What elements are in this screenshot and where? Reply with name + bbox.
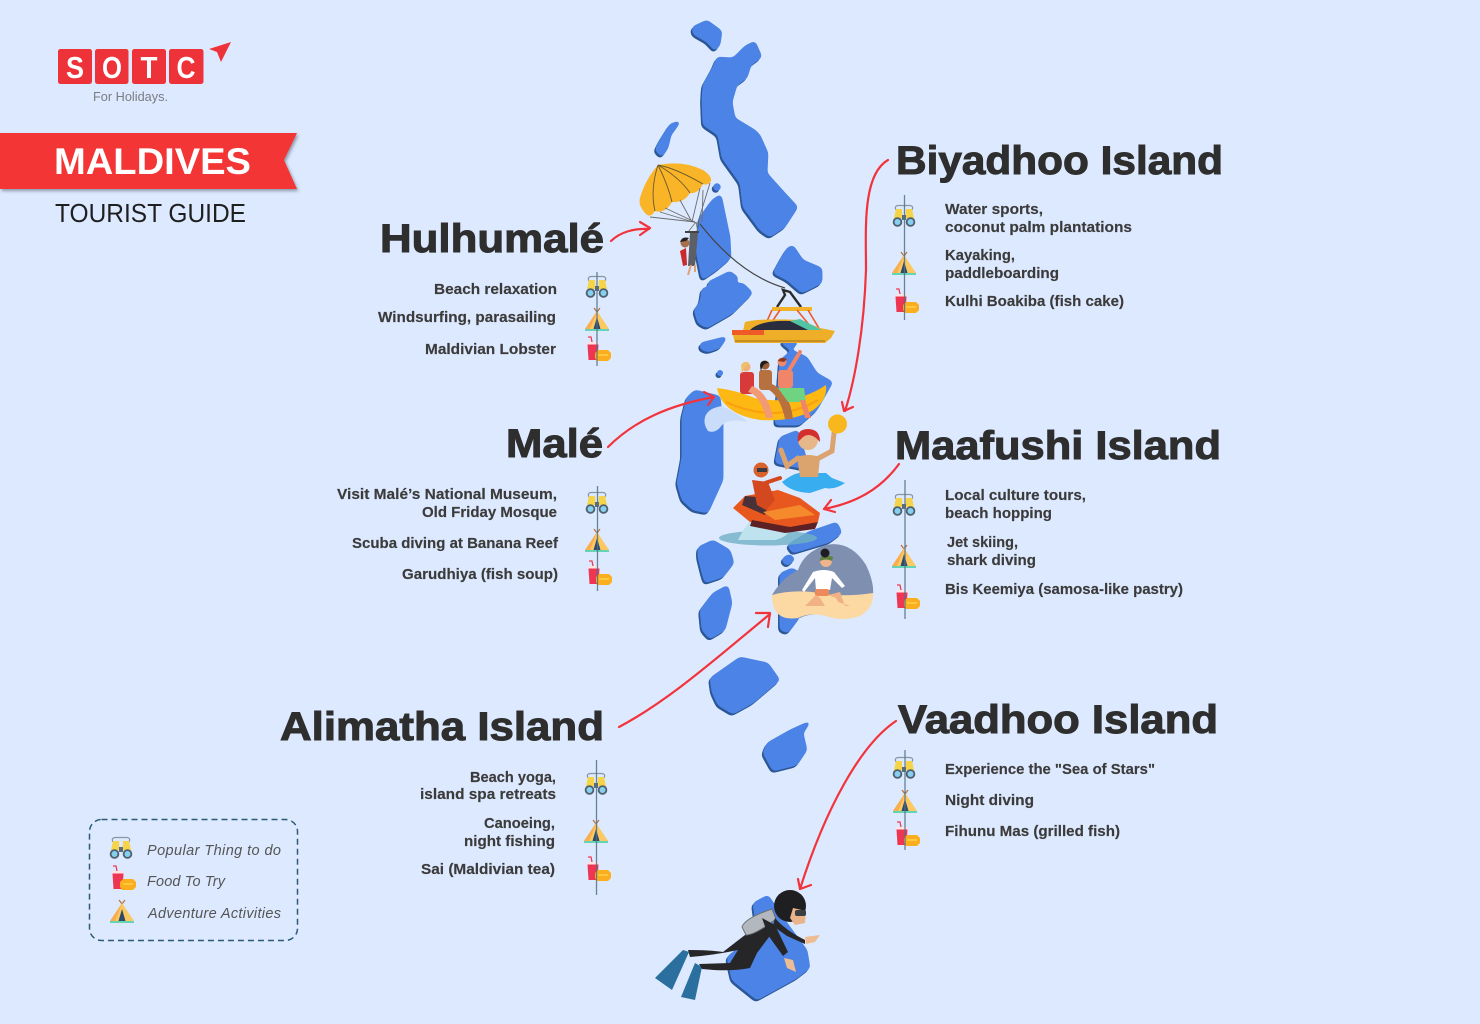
map: Maldives islands [655,20,842,1000]
panel: Maafushi Island: Local culture tours, [945,487,1086,504]
panel: Alimatha Island: Beach yoga, [470,769,556,786]
panel: Biyadhoo Island: Kulhi Boakiba (fish cake) [945,293,1124,310]
panel: Hulhumale [378,217,611,366]
panel: Biyadhoo Island: Water sports, [945,201,1043,218]
panel: Alimatha Island: island spa retreats [420,786,556,803]
illustration: scuba diver [655,890,820,1000]
arrow: Biyadhoo [842,160,888,411]
panel: Male: Scuba diving at Banana Reef [352,535,559,552]
panel: Hulhumale: Hulhumalé [380,217,604,261]
illustration: jet ski [719,462,820,546]
panel: Male [337,422,612,591]
logo: SOTC: T [140,50,158,85]
panel: Biyadhoo Island: Biyadhoo Island [896,139,1223,183]
panel: Hulhumale: Beach relaxation [434,281,557,298]
panel: Hulhumale: Windsurfing, parasailing [378,309,556,326]
panel: Alimatha Island: night fishing [464,833,555,850]
logo: SOTC: For Holidays. [93,89,168,104]
panel: Vaadhoo Island: Night diving [945,792,1034,809]
illustration: banana boat [704,352,826,432]
legend: Adventure Activities [147,906,281,922]
panel: Maafushi Island: shark diving [947,552,1036,569]
panel: Male: Garudhiya (fish soup) [402,566,558,583]
logo: SOTC [58,42,231,104]
logo: SOTC: S [66,50,84,85]
panel: Male: Visit Malé’s National Museum, [337,486,557,503]
panel: Maafushi Island: Bis Keemiya (samosa-like pastry) [945,581,1183,598]
legend [90,820,298,940]
subtitle: TOURIST GUIDE [55,200,246,228]
panel: Biyadhoo Island: coconut palm plantations [945,219,1132,236]
illustration: parasailer [640,163,711,275]
panel: Alimatha Island: Sai (Maldivian tea) [421,861,555,878]
illustration: speedboat [732,290,835,343]
panel: Alimatha Island: Canoeing, [484,815,555,832]
logo: SOTC: O [102,50,122,85]
panel: Hulhumale: Maldivian Lobster [425,341,556,358]
illustration: tow rope [700,224,785,288]
panel: Alimatha Island [280,705,611,895]
panel: Biyadhoo Island: Kayaking, [945,247,1015,264]
arrow: Male [608,392,714,447]
panel: Male: Malé [506,422,603,466]
panel: Biyadhoo Island [892,139,1223,320]
title ribbon: MALDIVES [0,133,297,189]
legend: Food To Try [147,874,226,890]
arrow: Vaadhoo [798,721,896,889]
panel: Vaadhoo Island: Vaadhoo Island [898,698,1218,742]
title ribbon: MALDIVES: MALDIVES [54,141,251,182]
arrow: Maafushi [824,464,899,512]
logo: SOTC: C [176,50,196,85]
panel: Maafushi Island: beach hopping [945,505,1052,522]
legend: Popular Thing to do [147,843,281,859]
illustration: water polo player [781,414,847,493]
panel: Biyadhoo Island: paddleboarding [945,265,1059,282]
panel: Vaadhoo Island: Fihunu Mas (grilled fish) [945,823,1120,840]
panel: Alimatha Island: Alimatha Island [280,705,604,749]
panel: Vaadhoo Island: Experience the "Sea of Stars" [945,761,1155,778]
panel: Male: Old Friday Mosque [422,504,557,521]
panel: Maafushi Island: Jet skiing, [947,534,1018,551]
arrow: Hulhumale [611,222,650,241]
panel: Maafushi Island: Maafushi Island [895,424,1221,468]
illustration: beach yoga [772,544,873,619]
panel: Vaadhoo Island [893,698,1218,850]
arrow: Alimatha [619,613,770,727]
panel: Maafushi Island [892,424,1221,619]
